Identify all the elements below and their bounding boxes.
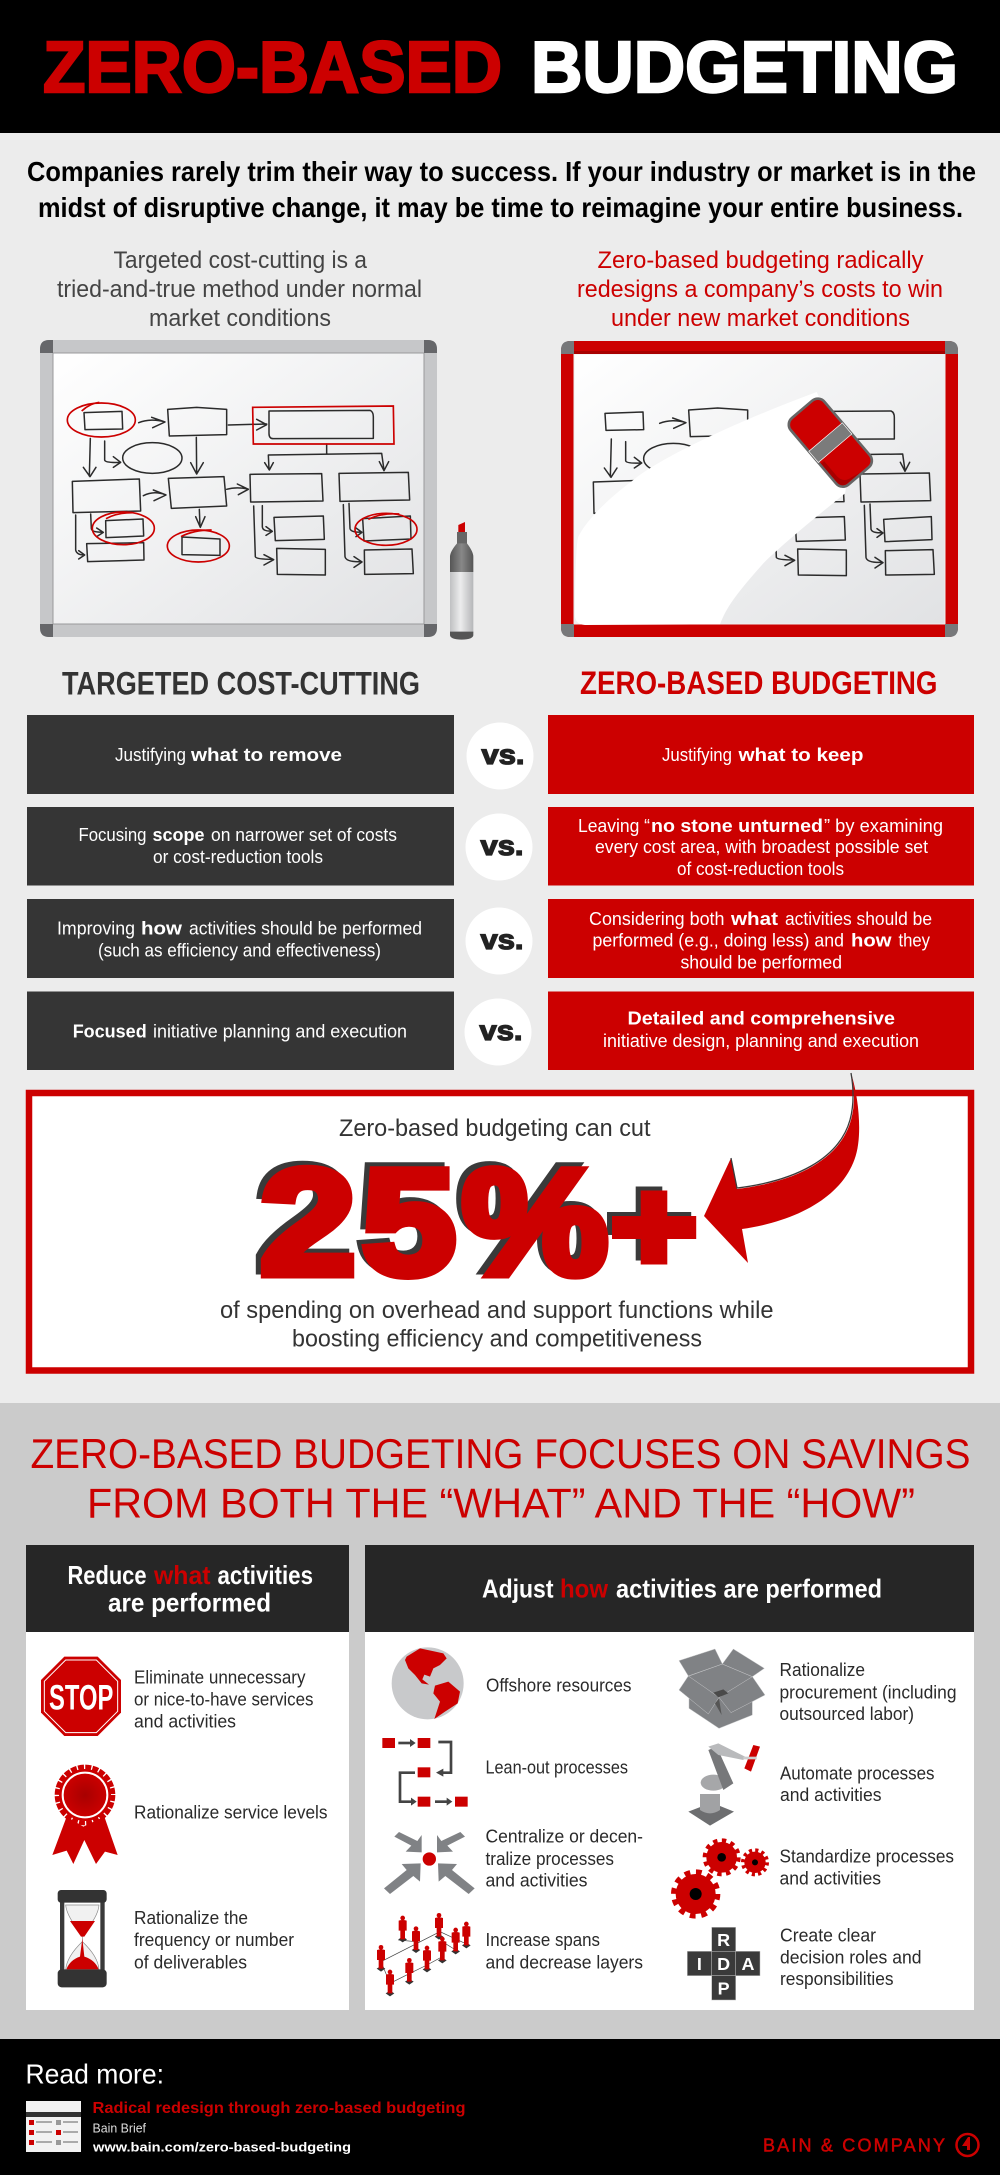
panel heading: reduce what: what — [153, 1560, 211, 1590]
erased swash — [575, 392, 850, 625]
left intro text: market conditions — [149, 305, 331, 332]
callout: 25% savings: Zero-based budgeting can cut — [339, 1115, 651, 1142]
title — [43, 28, 958, 108]
icon: RIDA grid — [687, 1927, 760, 2000]
text: decision roles — [780, 1924, 922, 1989]
vs badge 2 — [466, 814, 532, 880]
right column heading: ZERO-BASED BUDGETING — [580, 665, 938, 701]
comparison row 3: activities should be performed — [189, 918, 422, 938]
footer band — [0, 2039, 1000, 2175]
big number 25%+: % — [462, 1138, 608, 1306]
vs badge 4 — [464, 998, 532, 1066]
comparison row 2: scope — [152, 825, 204, 845]
text: eliminate: or nice-to-have services — [134, 1688, 314, 1710]
icon: hourglass — [58, 1890, 107, 1987]
whiteboard: zero-based budgeting — [561, 341, 958, 637]
text: standardize: and activities — [780, 1868, 881, 1888]
comparison row 3: should be performed — [680, 952, 842, 972]
text: eliminate: Eliminate unnecessary — [134, 1666, 306, 1688]
comparison row 2: of cost-reduction tools — [677, 859, 844, 879]
icon: robot arm — [688, 1743, 760, 1826]
icon: rosette ribbon — [52, 1767, 118, 1864]
comparison row 1 — [27, 715, 974, 794]
comparison row 1: Justifying — [115, 745, 186, 765]
text: frequency: Rationalize the — [134, 1907, 248, 1928]
title: BUDGETING — [531, 28, 958, 108]
big number 25%+: 5 — [357, 1134, 451, 1302]
comparison row 3: Considering both — [589, 909, 724, 929]
header band — [0, 0, 1000, 133]
Bain logo: BAIN & COMPANY — [763, 2136, 945, 2156]
icon: gears — [674, 1841, 767, 1916]
big number 25%+ — [255, 1134, 697, 1306]
text: frequency — [134, 1907, 294, 1972]
text: procurement — [780, 1659, 956, 1724]
vs badge 1 — [466, 722, 534, 790]
big number 25%+: + — [606, 1151, 692, 1294]
left intro text: tried-and-true method under normal — [57, 276, 422, 303]
icon: RIDA grid: D — [717, 1954, 730, 1974]
comparison row 1: Justifying — [662, 745, 732, 765]
text: centralize — [486, 1826, 643, 1890]
icon: globe — [392, 1647, 464, 1719]
red highlight marks — [67, 402, 417, 562]
left column heading: TARGETED COST-CUTTING — [62, 666, 420, 702]
panel heading: reduce what — [68, 1560, 313, 1618]
brief title and link: Bain Brief — [92, 2122, 147, 2136]
arrow: pointing to 25% — [704, 1073, 859, 1263]
icon: RIDA grid: A — [741, 1954, 754, 1974]
icon: stop sign — [41, 1657, 121, 1736]
comparison row 4: Detailed and comprehensive — [628, 1008, 895, 1028]
icon: converging arrows — [384, 1832, 475, 1894]
text: centralize: and activities — [486, 1870, 588, 1890]
text: centralize: tralize processes — [486, 1848, 614, 1869]
comparison row 1: what to remove — [190, 745, 342, 765]
comparison row 2: or cost-reduction tools — [153, 847, 323, 867]
light background panel — [0, 133, 1000, 1403]
vs badge 1: vs. — [482, 739, 524, 770]
comparison row 3 — [27, 899, 974, 978]
text: eliminate — [134, 1666, 314, 1732]
vs badge 3: vs. — [480, 924, 524, 955]
brief title and link — [92, 2100, 466, 2154]
thumbnail of brief — [26, 2101, 81, 2152]
text: decision roles: responsibilities — [780, 1968, 894, 1989]
big number 25%+: 5 — [362, 1138, 456, 1306]
panel heading: reduce what: Reduce — [68, 1560, 146, 1590]
text: standardize: Standardize processes — [780, 1846, 954, 1866]
comparison row 4 — [27, 992, 974, 1070]
icon: process flow — [382, 1738, 468, 1807]
text: service levels: Rationalize service levels — [134, 1802, 328, 1822]
text: eliminate: and activities — [134, 1710, 236, 1732]
panel: adjust how — [365, 1545, 974, 2010]
whiteboard: targeted cost-cutting — [40, 340, 437, 637]
text: frequency: of deliverables — [134, 1952, 247, 1972]
right intro text: under new market conditions — [611, 305, 910, 332]
text: lean-out: Lean-out processes — [486, 1756, 628, 1778]
vs badge 3 — [466, 908, 532, 974]
comparison row 4: initiative planning and execution — [153, 1022, 407, 1042]
text: spans: Increase spans — [486, 1929, 600, 1950]
panel heading: adjust how: how — [560, 1574, 609, 1604]
big number 25%+: % — [457, 1134, 603, 1302]
icon: eraser — [785, 395, 875, 490]
comparison row 2: ” by examining — [824, 816, 943, 836]
panel heading: adjust how — [482, 1574, 882, 1604]
section heading — [30, 1430, 970, 1526]
grey savings section background — [0, 1403, 1000, 2039]
text: automate — [780, 1762, 934, 1805]
comparison row 2 — [27, 807, 974, 886]
comparison row 3: how — [851, 930, 893, 950]
icon: marker pen — [450, 522, 473, 640]
comparison row 3: performed (e.g., doing less) and — [592, 930, 844, 950]
callout: 25% savings: of spending on overhead and support functions while — [220, 1297, 774, 1324]
comparison row 2: Focusing — [78, 825, 146, 845]
text: spans: and decrease layers — [486, 1952, 643, 1972]
text: automate: and activities — [780, 1784, 882, 1805]
icon: RIDA grid: P — [718, 1978, 730, 1998]
text: procurement: procurement (including — [780, 1682, 956, 1702]
vs badge 4: vs. — [480, 1015, 522, 1046]
read more label: Read more: — [26, 2058, 164, 2090]
panel heading: reduce what: are performed — [108, 1588, 271, 1618]
comparison row 3: what — [730, 909, 778, 929]
callout: 25% savings — [29, 1093, 971, 1370]
comparison row 3: Improving — [57, 918, 135, 938]
text: centralize: Centralize or decen- — [486, 1826, 643, 1846]
text: standardize — [780, 1846, 954, 1888]
big number 25%+: 2 — [255, 1134, 351, 1302]
panel heading: reduce what: activities — [218, 1560, 313, 1590]
icon: RIDA grid: R — [717, 1930, 730, 1950]
comparison row 3: activities should be — [785, 909, 932, 929]
text: offshore: Offshore resources — [486, 1674, 632, 1696]
title: ZERO-BASED — [43, 28, 502, 108]
icon: org of people — [377, 1913, 471, 1996]
callout: 25% savings: boosting efficiency and competitiveness — [292, 1326, 702, 1352]
text: spans — [486, 1929, 643, 1972]
comparison row 4: initiative design, planning and execution — [603, 1031, 919, 1051]
comparison row 1: what to keep — [737, 745, 864, 765]
comparison row 3: they — [898, 930, 930, 950]
comparison row 2: every cost area, with broadest possible set — [595, 837, 928, 857]
right intro text — [577, 247, 943, 332]
text: procurement: outsourced labor) — [780, 1703, 914, 1724]
vs badge 2: vs. — [480, 830, 524, 861]
big number 25%+: 2 — [260, 1138, 356, 1306]
text: frequency: frequency or number — [134, 1929, 294, 1950]
text: decision roles: Create clear — [780, 1924, 876, 1946]
left intro text: Targeted cost-cutting is a — [114, 247, 368, 274]
section heading: FROM BOTH THE “WHAT” AND THE “HOW” — [87, 1480, 915, 1526]
comparison row 2: Leaving “ — [578, 816, 650, 836]
brief title and link: www.bain.com/zero-based-budgeting — [92, 2140, 351, 2154]
icon: RIDA grid: I — [697, 1954, 702, 1974]
text: decision roles: decision roles and — [780, 1946, 922, 1968]
big number 25%+: + — [611, 1155, 697, 1298]
panel heading: adjust how: activities are performed — [616, 1574, 882, 1604]
left intro text — [57, 247, 422, 332]
icon: cardboard box — [679, 1649, 765, 1728]
comparison row 4: Focused — [73, 1022, 147, 1042]
panel heading: adjust how: Adjust — [482, 1574, 554, 1604]
text: automate: Automate processes — [780, 1762, 934, 1784]
comparison row 2: on narrower set of costs — [211, 825, 397, 845]
right intro text: redesigns a company’s costs to win — [577, 276, 943, 303]
brief title and link: Radical redesign through zero-based budgeting — [92, 2100, 466, 2117]
comparison row 3: how — [141, 918, 183, 938]
comparison row 3: (such as efficiency and effectiveness) — [98, 940, 381, 960]
icon: stop sign: STOP — [49, 1678, 113, 1717]
comparison row 2: no stone unturned — [651, 816, 823, 836]
right intro text: Zero-based budgeting radically — [598, 247, 924, 274]
panel: reduce what — [26, 1545, 349, 2010]
lead statement — [27, 156, 976, 223]
text: procurement: Rationalize — [780, 1659, 865, 1680]
